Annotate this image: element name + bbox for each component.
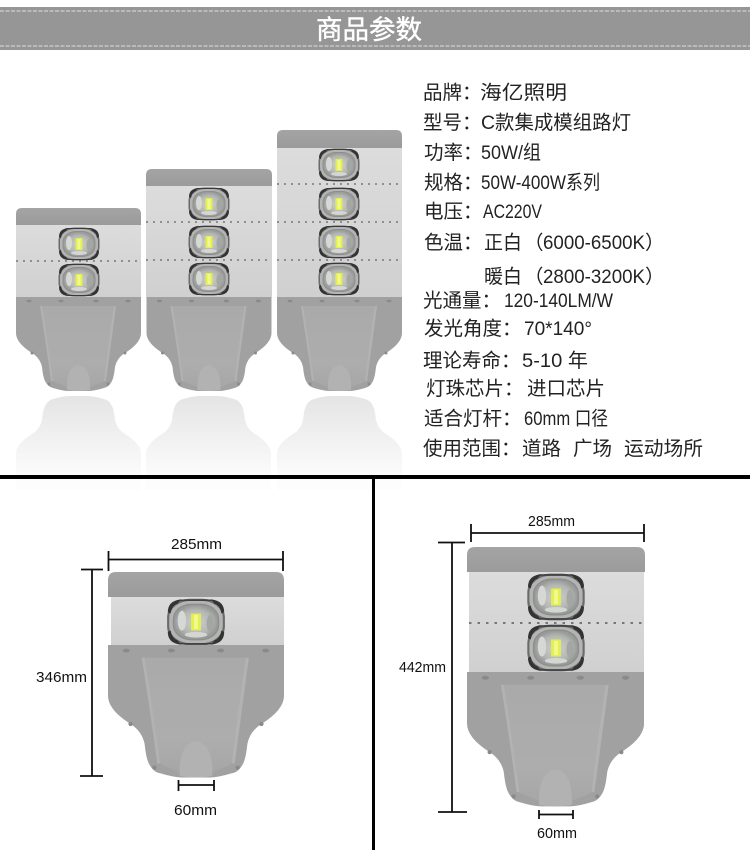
- colour temperature: warm: [484, 266, 665, 288]
- usage: 使用范围：: [423, 438, 521, 460]
- lifetime: 理论寿命：: [423, 350, 521, 372]
- model: C款集成模组路灯: [481, 112, 631, 134]
- black frame lines: [0, 475, 750, 850]
- range: 规格：: [424, 172, 483, 194]
- power: [424, 142, 541, 164]
- beam angle: [424, 318, 592, 340]
- beam angle: 70*140°: [524, 318, 592, 340]
- colour temperature: white: 色温：: [424, 232, 483, 254]
- range: [424, 172, 600, 194]
- lamp: three modules: [146, 169, 272, 391]
- header band: [0, 7, 750, 50]
- dimension: height 346mm: [36, 570, 103, 776]
- brand: 品牌：: [423, 82, 482, 104]
- luminous flux: [423, 290, 614, 312]
- voltage: 电压：: [424, 201, 483, 223]
- dimension: height 442mm: [399, 542, 467, 812]
- usage: 运动场所: [624, 438, 703, 460]
- beam angle: 发光角度：: [424, 318, 522, 340]
- brand: 海亿照明: [480, 82, 567, 104]
- lamp: single module detail: [108, 572, 284, 778]
- pole: [424, 408, 608, 430]
- colour temperature: warm: 暖白: [484, 266, 522, 288]
- lamp: four modules: [277, 130, 402, 391]
- dimension: width 285mm: [471, 513, 644, 542]
- range: 50W-400W系列: [481, 172, 600, 194]
- luminous flux: 光通量：: [423, 290, 501, 312]
- chip: 进口芯片: [527, 378, 605, 400]
- colour temperature: white: ）: [645, 232, 665, 254]
- colour temperature: warm: ）: [645, 266, 665, 288]
- pole: 60mm 口径: [524, 408, 608, 430]
- chip: [426, 378, 605, 400]
- power: 50W/组: [481, 142, 541, 164]
- chip: 灯珠芯片：: [426, 378, 524, 400]
- pole: 适合灯杆：: [424, 408, 522, 430]
- usage: 道路: [522, 438, 561, 460]
- lamp: two modules: [16, 208, 141, 391]
- usage: [423, 438, 703, 460]
- dimension: pole 60mm: [537, 810, 577, 842]
- dimension: pole 60mm: [174, 780, 217, 819]
- panel: double-module dimensions: [399, 513, 645, 842]
- dimension: height 442mm: 442mm: [399, 659, 446, 676]
- colour temperature: warm: 2800-3200K: [543, 266, 645, 288]
- luminous flux: 120-140LM/W: [504, 290, 614, 312]
- lamp: double module detail: [467, 547, 645, 806]
- colour temperature: white: 6000-6500K: [543, 232, 645, 254]
- voltage: [424, 201, 542, 223]
- reflections under lamps: [16, 396, 402, 490]
- voltage: AC220V: [483, 201, 542, 223]
- dimension: height 346mm: 346mm: [36, 669, 87, 686]
- colour temperature: white: [424, 232, 665, 254]
- brand: [423, 82, 567, 104]
- panel: single-module dimensions: [36, 536, 284, 819]
- dimension: width 285mm: [108, 536, 283, 571]
- dimension: pole 60mm: 60mm: [174, 802, 217, 819]
- colour temperature: white: 正白: [484, 232, 522, 254]
- title: 商品参数: [316, 15, 422, 45]
- lifetime: 5-10 年: [522, 350, 588, 372]
- colour temperature: warm: （: [524, 266, 544, 288]
- dimension: width 285mm: 285mm: [171, 536, 222, 553]
- dimension: width 285mm: 285mm: [528, 513, 575, 530]
- specification list: [423, 82, 703, 460]
- usage: 广场: [573, 438, 612, 460]
- model: 型号：: [423, 112, 482, 134]
- colour temperature: white: （: [524, 232, 544, 254]
- lifetime: [423, 350, 588, 372]
- dimension: pole 60mm: 60mm: [537, 825, 577, 842]
- power: 功率：: [424, 142, 483, 164]
